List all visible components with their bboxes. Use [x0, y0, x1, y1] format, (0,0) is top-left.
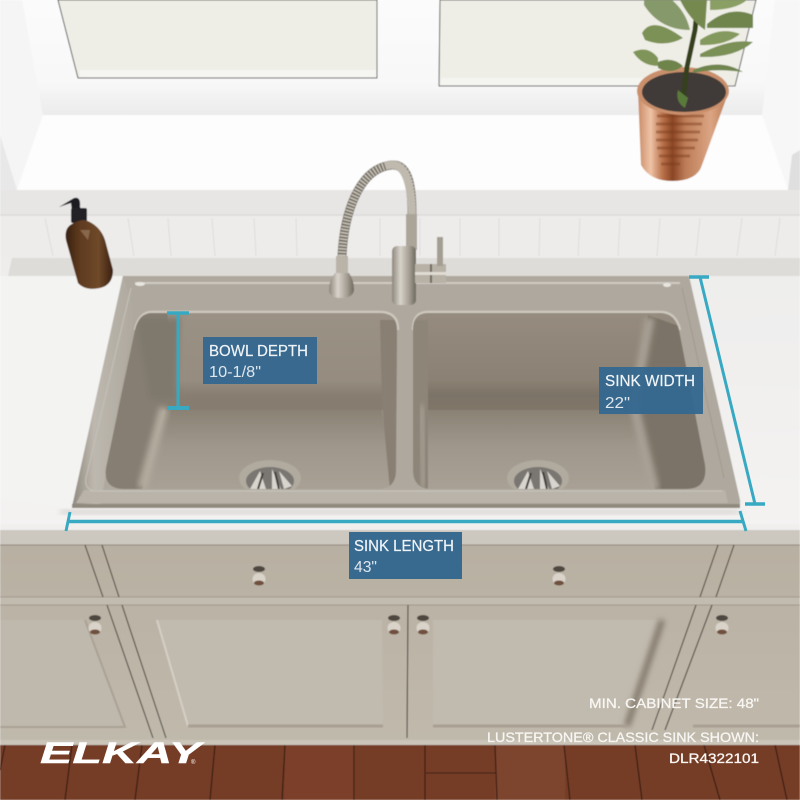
cabinets	[0, 545, 800, 745]
logo: Elkay	[40, 737, 206, 770]
plant in copper pot	[633, 0, 753, 181]
sink deck	[60, 276, 745, 514]
door panel: right	[693, 724, 800, 728]
wood floor	[0, 745, 800, 800]
soap bottle	[59, 198, 113, 289]
logo: Elkay: ®	[191, 759, 196, 766]
door panel: left	[0, 620, 125, 727]
callout: sink length	[349, 532, 462, 579]
callout: bowl depth: BOWL DEPTH	[209, 343, 308, 360]
callout: bowl depth	[203, 337, 317, 384]
door panel: centre left	[158, 620, 383, 727]
right window pane	[439, 0, 756, 86]
drain, left bowl	[239, 460, 301, 490]
left window pane	[58, 0, 377, 78]
callout: sink width: SINK WIDTH	[605, 373, 695, 390]
countertop	[0, 258, 800, 545]
text: minimum cabinet size: MIN. CABINET SIZE: 48"	[589, 695, 759, 711]
window frame	[0, 0, 800, 205]
plant leaves	[633, 0, 753, 108]
dimension line: sink length	[66, 511, 746, 531]
callout: bowl depth: 10-1/8"	[209, 364, 261, 381]
copper pot	[638, 91, 729, 181]
plant stem	[683, 0, 698, 100]
callout: sink width: 22"	[605, 395, 630, 412]
cabinet knobs	[88, 566, 728, 634]
callout: sink width	[599, 367, 703, 414]
backsplash	[0, 190, 800, 258]
text: sink series: LUSTERTONE® CLASSIC SINK SHOWN:	[487, 729, 759, 745]
right bowl	[410, 310, 712, 496]
drain, right bowl	[507, 460, 569, 490]
logo: Elkay: ELKAY	[40, 737, 206, 770]
text: model number: DLR4322101	[669, 750, 759, 766]
left bowl	[100, 310, 400, 496]
window sill	[17, 115, 788, 190]
callout: sink length: SINK LENGTH	[354, 538, 454, 555]
dimension line: sink width	[689, 277, 765, 504]
faucet	[329, 165, 446, 305]
callout: sink length: 43"	[354, 559, 377, 576]
door panel: centre right	[433, 620, 662, 726]
dimension line: bowl depth	[167, 313, 189, 408]
